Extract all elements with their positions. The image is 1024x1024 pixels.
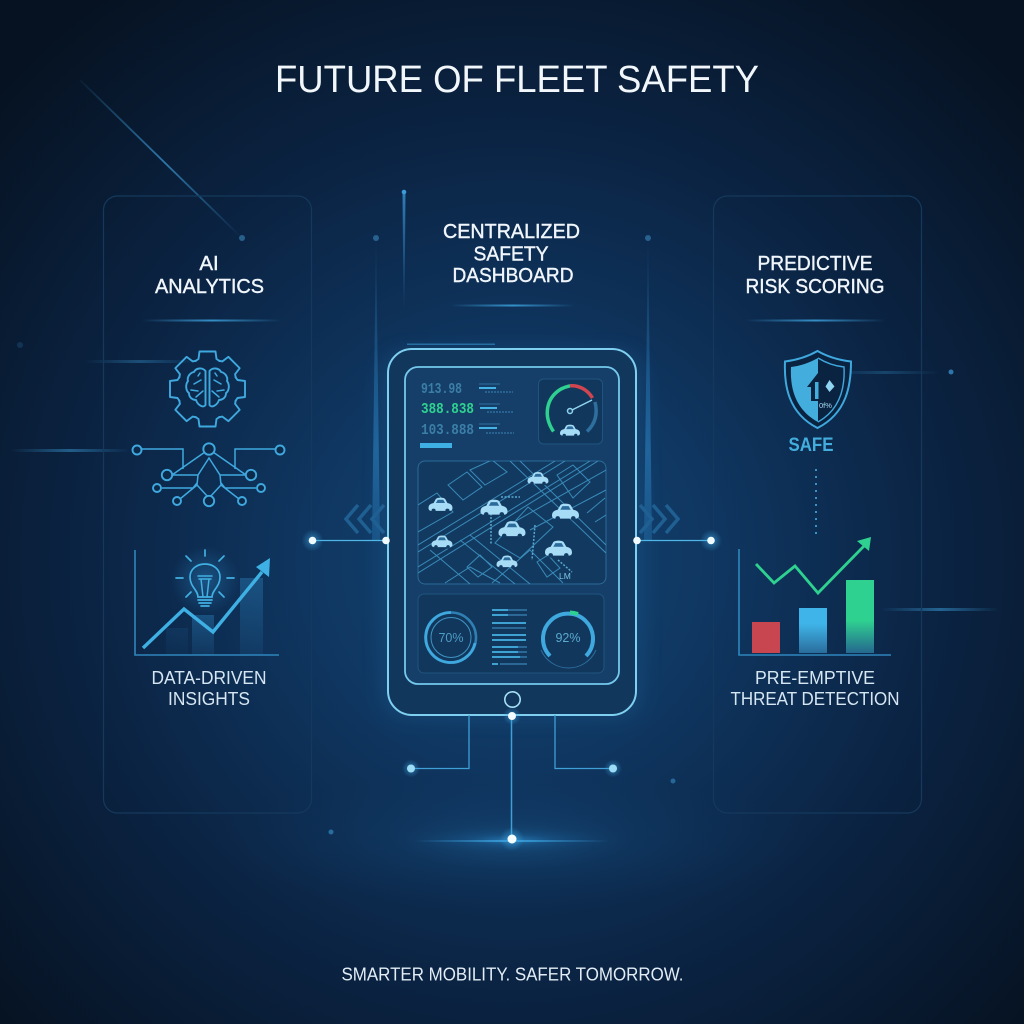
tablet dashboard	[382, 349, 641, 715]
heading: AI analytics: AI	[199, 252, 219, 275]
connector: right panel to tablet	[637, 530, 722, 552]
heading: predictive risk scoring: RISK SCORING	[746, 275, 884, 298]
label: safe: SAFE	[788, 435, 834, 456]
heading: centralized safety dashboard: SAFETY	[474, 242, 549, 266]
home button	[505, 692, 520, 707]
gauge	[538, 379, 602, 444]
heading: AI analytics: ANALYTICS	[155, 275, 264, 298]
icon: shield: 0f%	[819, 401, 832, 410]
panel: AI analytics	[104, 196, 312, 813]
title: FUTURE OF FLEET SAFETY	[275, 59, 759, 101]
dotted connector	[815, 469, 817, 534]
map	[418, 460, 606, 584]
chart: insights growth with light bulb	[135, 546, 279, 655]
metrics readout: 388.838	[421, 401, 474, 418]
chart: threat detection bars	[739, 537, 891, 655]
text: data-driven insights	[152, 668, 266, 709]
footer tagline: SMARTER MOBILITY. SAFER TOMORROW.	[342, 964, 684, 984]
stats panel	[418, 594, 604, 673]
heading: predictive risk scoring: PREDICTIVE	[758, 252, 872, 275]
text: pre-emptive threat detection: PRE-EMPTIVE	[755, 668, 875, 688]
text: data-driven insights: DATA-DRIVEN	[152, 668, 266, 688]
map: LM	[559, 571, 571, 581]
heading: centralized safety dashboard: DASHBOARD	[452, 264, 574, 287]
icon: shield	[785, 351, 851, 428]
heading: centralized safety dashboard: CENTRALIZED	[443, 220, 580, 243]
icon: brain in gear	[170, 352, 245, 426]
dial: 70%: 70%	[438, 631, 464, 645]
heading: centralized safety dashboard	[443, 220, 580, 287]
metrics readout: 103.888	[421, 422, 474, 439]
chevrons: right	[640, 505, 678, 533]
dial: 70%	[426, 612, 476, 662]
dial: 92%	[541, 612, 596, 668]
heading: predictive risk scoring	[746, 252, 884, 298]
heading: AI analytics	[155, 252, 264, 298]
panel: predictive risk scoring	[714, 196, 922, 813]
connectors: tablet to base	[402, 707, 622, 851]
connector: left panel to tablet	[302, 530, 386, 552]
text: data-driven insights: INSIGHTS	[168, 689, 250, 709]
chevrons: left	[346, 505, 384, 533]
text: pre-emptive threat detection: THREAT DETECTION	[730, 689, 900, 709]
metrics readout: 913.98	[421, 381, 462, 398]
text: pre-emptive threat detection	[730, 668, 900, 709]
list bars	[492, 610, 527, 664]
metrics readout	[420, 381, 514, 448]
icon: neural network	[132, 443, 284, 506]
dial: 92%: 92%	[555, 631, 581, 645]
